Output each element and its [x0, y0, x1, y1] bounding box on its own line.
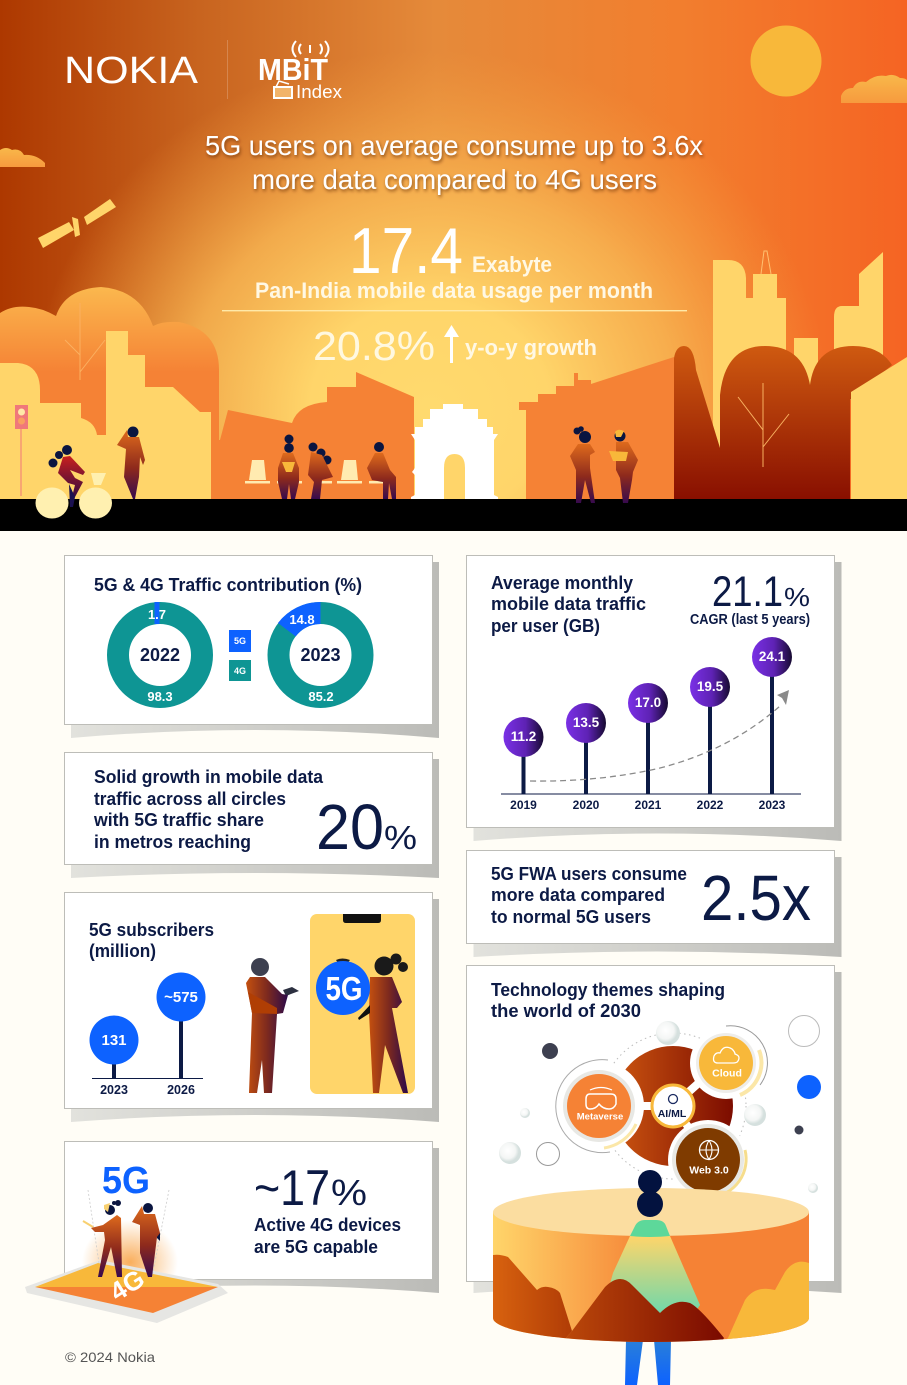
lollipop chart: 2021 — [635, 798, 662, 812]
text block: in metros reaching — [94, 832, 251, 852]
heading: 5G users on average consume up to 3.6x — [205, 130, 703, 161]
panel: traffic contribution — [64, 556, 439, 738]
logo: MBiT Index: MBiT — [258, 52, 328, 87]
node: Web 3.0 — [668, 1120, 748, 1200]
stat: 17.4 Exabyte — [255, 214, 653, 303]
stat: 17.4 Exabyte: 17.4 — [349, 214, 463, 287]
panel: 5G capable devices — [25, 1142, 439, 1323]
text block — [93, 767, 324, 852]
icon: cloud top right — [841, 75, 907, 103]
decorative dots — [499, 1016, 821, 1193]
logo: Nokia: NOKIA — [64, 50, 199, 92]
stat: 20.8% growth — [313, 323, 597, 369]
donut: 2023 — [278, 602, 362, 704]
stat: CAGR — [690, 568, 810, 628]
donut: 2023: 2023 — [300, 645, 341, 665]
panel: 5G subscribers — [64, 892, 439, 1122]
stat: 20%: 20 — [316, 791, 384, 863]
donut: 2023: 85.2 — [308, 689, 334, 704]
city: right yellow skyline — [713, 251, 883, 500]
stat: 20%: % — [384, 819, 417, 856]
icon: 5G badge: 5G — [326, 970, 362, 1007]
lollipop chart: ~575 — [164, 989, 198, 1006]
heading: mobile data traffic — [491, 594, 646, 614]
divider — [227, 40, 228, 99]
panel: technology themes — [466, 966, 842, 1293]
donut: 2022 — [118, 602, 202, 704]
panel: FWA users — [466, 850, 842, 957]
node: Cloud: Cloud — [712, 1068, 742, 1080]
text block — [491, 864, 687, 927]
lollipop chart — [90, 972, 206, 1097]
icon: traffic light — [15, 405, 28, 496]
lollipop chart: 2019 — [510, 798, 537, 812]
stat: 20.8% growth: 20.8% — [313, 323, 435, 369]
person: man on tablet — [132, 1203, 160, 1277]
cylinder top — [493, 1188, 809, 1236]
lollipop chart: 19.5 — [697, 679, 724, 694]
text block: Solid growth in mobile data — [94, 767, 324, 787]
hero banner — [0, 0, 907, 531]
logo: MBiT Index: Index — [296, 82, 342, 102]
person: man gesturing — [246, 958, 299, 1093]
lollipop chart: 13.5 — [573, 715, 600, 730]
heading: more data compared to 4G users — [252, 164, 657, 195]
stat: ~17% — [254, 1160, 401, 1257]
lollipop chart: 131 — [101, 1032, 127, 1049]
person: standing on phone — [117, 426, 145, 499]
person: cyclist — [36, 445, 112, 518]
legs — [625, 1340, 671, 1385]
lollipop chart: 2026 — [167, 1083, 195, 1097]
city: right corner building — [851, 357, 907, 500]
people: two standing talkers — [570, 426, 638, 503]
donut: 2022: 1.7 — [148, 607, 166, 622]
heading — [89, 920, 214, 961]
phone illustration — [310, 914, 415, 1094]
node: AI/ML — [652, 1085, 694, 1127]
node: Web 3.0: Web 3.0 — [689, 1164, 729, 1176]
heading — [491, 980, 725, 1021]
heading — [491, 573, 646, 636]
stat: 2.5x: 2.5x — [701, 862, 811, 934]
cone of light — [600, 1236, 700, 1320]
city: orange buildings right — [519, 357, 674, 500]
city: left yellow buildings — [0, 331, 211, 500]
text block: more data compared — [491, 885, 665, 905]
head — [637, 1170, 663, 1217]
shoulders — [630, 1220, 670, 1237]
text block: traffic across all circles — [94, 789, 286, 809]
lollipop chart: 2020 — [573, 798, 600, 812]
icon: sun — [750, 26, 822, 96]
text block: 5G FWA users consume — [491, 864, 687, 884]
panel: data per user — [466, 556, 842, 841]
node: Cloud — [690, 1026, 767, 1099]
heading: per user (GB) — [491, 616, 600, 636]
donut: 2022: 98.3 — [147, 689, 173, 704]
city: domes — [674, 346, 892, 500]
illustration: tablet with 4G: 4G — [104, 1263, 150, 1307]
lollipop chart: 17.0 — [635, 695, 661, 710]
trend arrow — [530, 690, 789, 781]
mountains — [493, 1255, 809, 1345]
stat: CAGR: 21.1 — [712, 568, 783, 616]
city: orange buildings left — [211, 372, 414, 500]
person: woman on tablet — [83, 1200, 122, 1277]
city: left trees — [0, 287, 219, 500]
text block: to normal 5G users — [491, 907, 651, 927]
city: India Gate — [411, 404, 498, 500]
logo: MBiT Index — [258, 41, 342, 102]
lollipop chart: 2023 — [759, 798, 786, 812]
panel: circles growth — [64, 752, 439, 878]
lollipop chart — [501, 637, 801, 812]
stat: ~17%: % — [331, 1172, 367, 1213]
stat: CAGR: % — [784, 582, 810, 612]
heading: (million) — [89, 941, 156, 961]
icon: satellite — [38, 199, 116, 248]
illustration: tablet with 4G — [25, 1160, 228, 1323]
donut: 2023: 14.8 — [289, 612, 315, 627]
heading: 5G subscribers — [89, 920, 214, 940]
lollipop chart: 24.1 — [759, 649, 786, 664]
text: 5G label: 5G — [102, 1160, 150, 1202]
icon: cloud left — [0, 148, 45, 167]
node: Metaverse: Metaverse — [577, 1112, 623, 1122]
illustration: person behind cylinder — [493, 1170, 809, 1385]
legend: 4G — [234, 666, 246, 676]
stat: 20.8% growth: y-o-y growth — [465, 335, 597, 360]
node: AI/ML: AI/ML — [658, 1108, 687, 1120]
lollipop chart: 2023 — [100, 1083, 128, 1097]
node: Metaverse — [554, 1060, 644, 1153]
stat: ~17%: Active 4G devices — [254, 1215, 401, 1235]
text block: with 5G traffic share — [93, 810, 264, 830]
heading: 5G & 4G Traffic contribution (%) — [94, 575, 362, 595]
road — [0, 499, 907, 531]
legend: 5G — [234, 636, 246, 646]
stat: CAGR: CAGR (last 5 years) — [690, 612, 810, 628]
stat: 17.4 Exabyte: Pan-India mobile data usage per month — [255, 278, 653, 303]
cylinder — [493, 1212, 809, 1342]
heading: the world of 2030 — [491, 1001, 641, 1021]
city: benches — [245, 460, 383, 484]
stat: 17.4 Exabyte: Exabyte — [472, 252, 552, 277]
stat: ~17%: ~17 — [254, 1160, 330, 1216]
icon: 5G badge — [316, 961, 370, 1015]
legend — [229, 630, 251, 681]
donut: 2022: 2022 — [140, 645, 180, 665]
theme wheel — [554, 1021, 767, 1200]
copyright: © 2024 Nokia — [65, 1349, 155, 1365]
lollipop chart: 11.2 — [511, 729, 536, 744]
heading: Average monthly — [491, 573, 633, 593]
person: woman with buns — [336, 954, 408, 1093]
stat: ~17%: are 5G capable — [254, 1237, 378, 1257]
lollipop chart: 2022 — [697, 798, 724, 812]
heading — [205, 130, 703, 195]
heading: Technology themes shaping — [491, 980, 725, 1000]
people: seated group — [278, 434, 396, 499]
